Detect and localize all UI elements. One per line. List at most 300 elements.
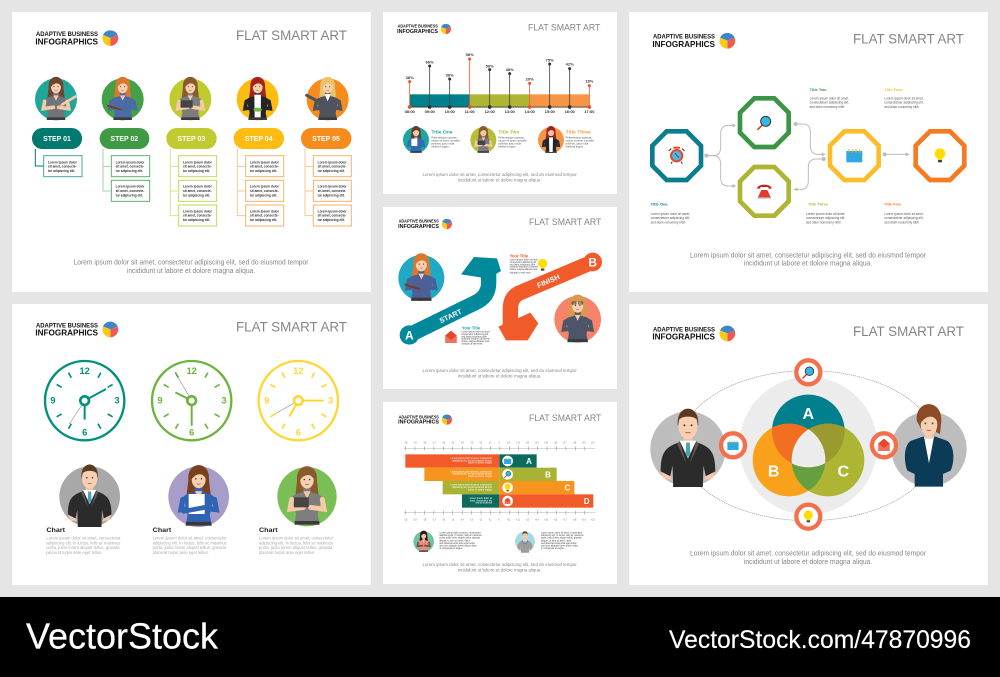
- orbit ellipse: [680, 371, 937, 521]
- top axis: +15: [544, 442, 549, 444]
- legend two: pulvinar, justo nulla: [498, 141, 521, 145]
- footer text: [73, 260, 309, 275]
- clock two: 6: [189, 428, 194, 438]
- text: finish title: euismod tincidunt ut laoreet: [510, 266, 538, 269]
- step 04 column: Lorem ipsum dolor: [250, 209, 280, 213]
- legend two: Title Two: [498, 129, 519, 135]
- logo: ADAPTIVE BUSINESS: [36, 31, 98, 38]
- footer text: incididunt ut labore et dolore magna aliqua.: [458, 567, 541, 572]
- bar captions: labore et dolore magna: [468, 488, 493, 491]
- heading: FLAT SMART ART: [853, 323, 964, 339]
- octagon: bulb: [916, 131, 964, 180]
- step 05 column: sit amet, consecte-: [318, 214, 346, 218]
- bottom axis: -10: [404, 519, 408, 521]
- text: title two: consectetuer adipiscing elit,: [810, 101, 849, 105]
- bar captions: Lorem ipsum dolor sit amet, consectetur: [451, 457, 492, 460]
- bar letters: D: [584, 497, 590, 506]
- heading: FLAT SMART ART: [529, 217, 602, 227]
- step 05 column: tur adipiscing elit.: [318, 218, 345, 222]
- step 05 column: STEP 05: [312, 136, 340, 143]
- footer text: Lorem ipsum dolor sit amet, consectetur adipiscing elit, sed do eiusmod tempor: [422, 368, 577, 373]
- person and text right: nisi nunc aliquam lorem ipsum dolor: [541, 545, 578, 548]
- heading: FLAT SMART ART: [236, 27, 347, 43]
- percentage spines: 18%: [585, 79, 594, 84]
- bottom axis: -11: [488, 519, 492, 521]
- step 02 column: sit amet, consecte-: [116, 189, 144, 193]
- footer text: [422, 172, 577, 183]
- bar letters: [526, 457, 590, 506]
- watermark band: [0, 597, 1000, 677]
- bar captions: [451, 457, 493, 505]
- logo: [397, 24, 451, 35]
- step 05 column: Lorem ipsum dolor: [318, 160, 347, 164]
- legend one: pulvinar, justo nulla: [431, 141, 454, 145]
- legend one: Title One: [431, 129, 453, 135]
- chart caption two: placerat turpis ante eget tellus.: [153, 550, 209, 555]
- watermark band: VectorStock: [26, 616, 219, 656]
- bar letters: A: [526, 457, 532, 466]
- step 03 column: sit amet, consecte-: [183, 189, 212, 193]
- person and text right: Lorem ipsum dolor sit amet, consectetur: [541, 531, 583, 534]
- person and text left: [413, 531, 483, 552]
- arrow: finish: B: [588, 255, 597, 269]
- step 03 column: tur adipiscing elit.: [183, 218, 210, 222]
- step 03 column: STEP 03: [177, 136, 205, 143]
- chart caption two: Lorem ipsum dolor sit amet, consectetur: [153, 535, 227, 540]
- bottom axis: +16: [553, 519, 558, 521]
- person and text right: porta, justo lorem aliquet tellus, gravida: [541, 537, 582, 540]
- bottom axis: +11: [507, 519, 511, 521]
- clock two: 9: [157, 396, 163, 406]
- text: start title: Lorem ipsum dolor sit amet,: [461, 331, 490, 334]
- step 04 column: sit amet, consecte-: [250, 165, 279, 169]
- bottom axis: +14: [535, 519, 539, 521]
- logo: ADAPTIVE BUSINESS: [398, 24, 438, 29]
- person and text left: aliquet, ut sem sit amet, dolor: [439, 539, 470, 542]
- heading: FLAT SMART ART: [236, 318, 347, 334]
- panel: venn diagram: [629, 304, 988, 585]
- logo: ADAPTIVE BUSINESS: [653, 34, 715, 41]
- chart caption one: adipiscing elit. In luctus, felis ac maximus: [46, 540, 120, 545]
- chart caption three: placerat turpis ante eget tellus.: [259, 550, 315, 555]
- step 04 column: tur adipiscing elit.: [250, 169, 277, 173]
- text: finish title: [510, 253, 539, 274]
- text: finish title: sed diam nonummy nibh: [510, 264, 536, 266]
- footer text: Lorem ipsum dolor sit amet, consectetur adipiscing elit, sed do eiusmod tempor: [690, 551, 927, 558]
- heading: FLAT SMART ART: [853, 30, 964, 46]
- octagon: magnifier: [740, 98, 789, 147]
- percentage spines: 50%: [486, 63, 494, 68]
- step 05 column: [301, 77, 351, 226]
- step 04 column: tur adipiscing elit.: [250, 218, 277, 222]
- bottom axis: -12: [479, 519, 483, 521]
- top axis: +16: [553, 442, 558, 444]
- person and text right: sed placerat turpis ante eget tellus: [541, 542, 577, 545]
- person and text left: in consequat et augue.: [439, 547, 463, 550]
- top axis: +17: [563, 442, 567, 444]
- icon ring: bulb: [796, 505, 820, 529]
- icon: envelope: [445, 331, 457, 343]
- arrow: start: A: [405, 328, 414, 342]
- person and text right: aliquet, ut sem sit amet, dolor: [541, 539, 572, 542]
- time labels: 13:00: [505, 109, 516, 114]
- percentage spines: 38%: [406, 75, 414, 80]
- logo: [35, 30, 118, 46]
- step 04 column: sit amet, consecte-: [250, 214, 279, 218]
- text: finish title: consectetur adipiscing elit,: [510, 261, 537, 264]
- bottom axis: +15: [544, 519, 549, 521]
- person and text right: [515, 531, 584, 553]
- arrow: start: START: [438, 307, 464, 325]
- footer text: Lorem ipsum dolor sit amet, consectetur adipiscing elit, sed do eiusmod tempor: [422, 172, 577, 177]
- bottom axis: -17: [432, 519, 436, 521]
- chart caption three: porta, justo lorem aliquet tellus, gravida: [259, 545, 333, 550]
- bottom axis: +18: [572, 519, 577, 521]
- text: title four: sed diam nonummy nibh: [884, 105, 919, 109]
- icon: bulb: [538, 259, 547, 271]
- chart caption three: Lorem ipsum dolor sit amet, consectetur: [259, 535, 334, 540]
- step 02 column: tur adipiscing elit.: [116, 169, 143, 173]
- step 02 column: Lorem ipsum dolor: [116, 185, 145, 189]
- clock two: 3: [221, 396, 227, 406]
- time labels: 09:00: [425, 109, 436, 114]
- panel: clocks: [12, 304, 371, 585]
- text: title one: consectetuer adipiscing elit,: [651, 216, 690, 220]
- footer text: Lorem ipsum dolor sit amet, consectetur adipiscing elit, sed do eiusmod tempor: [422, 562, 577, 567]
- octagon: phone: [740, 167, 789, 216]
- legend three: Title Three: [566, 129, 591, 135]
- text: title four: [884, 87, 924, 109]
- step 04 column: Lorem ipsum dolor: [250, 185, 280, 189]
- logo: ADAPTIVE BUSINESS: [399, 414, 439, 419]
- text: title four: consectetuer adipiscing elit,: [884, 101, 924, 105]
- legend three: eleifend augue.: [566, 144, 584, 148]
- top axis: -13: [470, 442, 474, 444]
- legend three: [538, 126, 595, 153]
- step 02 column: tur adipiscing elit.: [116, 193, 143, 197]
- octagon: clock: [652, 131, 701, 180]
- bottom axis: -14: [460, 519, 464, 521]
- person: woman with tablet: [277, 466, 337, 526]
- footer text: [422, 368, 577, 378]
- step 04 column: sit amet, consecte-: [250, 189, 279, 193]
- legend one: neque sit amet convallis: [431, 138, 460, 142]
- footer text: incididunt ut labore et dolore magna aliqua.: [458, 178, 541, 183]
- clock three: [259, 361, 338, 440]
- arrow: finish: [498, 253, 602, 340]
- icon ring: magnifier: [796, 360, 820, 384]
- step 01 column: STEP 01: [43, 136, 71, 143]
- step 04 column: tur adipiscing elit.: [250, 193, 277, 197]
- venn circles: C: [838, 463, 850, 480]
- footer text: [690, 252, 927, 268]
- panel: start to finish arrows: [383, 207, 617, 389]
- step 04 column: STEP 04: [245, 136, 273, 143]
- text: start title: volutpat ut wisi enim.: [461, 343, 483, 346]
- step 01 column: [32, 77, 82, 177]
- logo: [652, 33, 735, 49]
- text: title two: Lorem ipsum dolor sit amet,: [810, 97, 849, 101]
- time labels: 12:00: [485, 109, 496, 114]
- step 01 column: tur adipiscing elit.: [48, 169, 75, 173]
- text: title three: consectetuer adipiscing elit,: [806, 216, 845, 220]
- bar captions: Lorem ipsum dolor sit: [470, 497, 492, 500]
- person and text left: sed placerat turpis ante eget tellus: [439, 542, 476, 545]
- legend two: eleifend augue.: [498, 144, 517, 148]
- step 03 column: Lorem ipsum dolor: [183, 209, 213, 213]
- chart caption one: porta, justo lorem aliquet tellus, gravida: [46, 545, 120, 550]
- step 05 column: Lorem ipsum dolor: [318, 185, 347, 189]
- text: title five: consectetuer adipiscing elit,: [884, 216, 924, 220]
- top axis: -11: [488, 442, 492, 444]
- top axis: -15: [451, 442, 455, 444]
- time labels: 16:00: [565, 109, 576, 114]
- heading: FLAT SMART ART: [528, 22, 601, 32]
- footer text: [690, 551, 927, 566]
- top axis: 0: [499, 442, 501, 444]
- icon ring: envelope: [872, 433, 896, 457]
- top axis: -18: [423, 442, 427, 444]
- top axis: +12: [516, 442, 521, 444]
- percentage spines: 20%: [526, 77, 534, 82]
- percentage spines: 42%: [566, 62, 574, 67]
- step 05 column: sit amet, consecte-: [318, 165, 346, 169]
- text: start title: consectetur adipiscing elit,: [461, 333, 489, 336]
- bottom axis: +10: [591, 519, 595, 521]
- percentage spines: 38%: [446, 72, 454, 77]
- text: finish title: dolore magna aliquam erat: [510, 268, 538, 271]
- legend one: Pellentesque egestas,: [431, 135, 458, 139]
- bottom axis: [404, 513, 595, 521]
- text: start title: dolore magna aliquam erat: [461, 340, 489, 343]
- text: title two: [810, 87, 849, 109]
- bar captions: sed do eiusmod: [476, 503, 493, 505]
- clock two: 12: [186, 366, 197, 376]
- watermark band: VectorStock.com/47870996: [669, 626, 971, 654]
- top axis: -17: [432, 442, 436, 444]
- timeline bars: [409, 94, 590, 107]
- bottom axis: +13: [525, 519, 530, 521]
- step 02 column: Lorem ipsum dolor: [116, 160, 145, 164]
- logo: INFOGRAPHICS: [652, 39, 715, 49]
- logo: INFOGRAPHICS: [652, 332, 715, 342]
- step 03 column: Lorem ipsum dolor: [183, 185, 213, 189]
- logo: INFOGRAPHICS: [35, 36, 98, 46]
- person and text left: adipiscing elit. In luctus, felis ac maximus: [439, 534, 483, 537]
- step 03 column: tur adipiscing elit.: [183, 193, 210, 197]
- bottom axis: 0: [499, 519, 501, 521]
- time labels: [405, 109, 595, 114]
- logo: ADAPTIVE BUSINESS: [399, 219, 439, 224]
- clock three: 9: [264, 396, 269, 406]
- logo: INFOGRAPHICS: [397, 29, 438, 35]
- panel: five steps: [12, 12, 371, 292]
- clock two: [152, 361, 231, 440]
- top axis: +13: [525, 442, 530, 444]
- clock three: 3: [328, 396, 333, 406]
- text: title four: Title Four: [884, 87, 903, 92]
- person and text left: Lorem ipsum dolor sit amet, consectetur: [439, 531, 481, 534]
- footer text: incididunt ut labore et dolore magna aliqua.: [127, 268, 255, 275]
- text: finish title: Your Title: [510, 253, 528, 259]
- connectors: [704, 122, 910, 191]
- legend two: Pellentesque egestas,: [498, 135, 525, 139]
- person and text right: in consequat et augue.: [541, 547, 565, 550]
- text: finish title: volutpat ut wisi enim.: [510, 271, 532, 274]
- text: title five: Title Five: [884, 202, 902, 207]
- top axis: -19: [413, 442, 417, 444]
- percentage spines: 60%: [426, 60, 434, 65]
- businessman: [650, 409, 726, 487]
- businesswoman: [891, 404, 967, 487]
- text: title one: [651, 202, 690, 224]
- percentage spines: 48%: [506, 67, 514, 72]
- legend three: Pellentesque egestas,: [566, 135, 592, 139]
- step 05 column: tur adipiscing elit.: [318, 193, 345, 197]
- text: finish title: Lorem ipsum dolor sit amet,: [510, 259, 539, 262]
- clock one: [45, 361, 124, 440]
- chart caption one: [46, 527, 121, 555]
- footer text: incididunt ut labore et dolore magna aliqua.: [458, 373, 541, 378]
- step 02 column: STEP 02: [110, 136, 138, 143]
- bar captions: adipiscing elit, sed do eiusmod tempor: [452, 486, 492, 489]
- top axis: +10: [591, 442, 595, 444]
- clock one: 12: [79, 366, 90, 376]
- step 05 column: sit amet, consecte-: [318, 189, 346, 193]
- person: man: [59, 464, 120, 527]
- text: title one: Title One: [651, 202, 668, 207]
- time labels: 10:00: [445, 109, 456, 114]
- top axis: [404, 442, 595, 448]
- octagon: calendar: [830, 131, 879, 180]
- text: title two: sed diam nonummy nibh: [810, 105, 845, 109]
- footer text: [422, 562, 577, 572]
- logo: [35, 322, 118, 338]
- percentage spines: [406, 52, 594, 109]
- text: title five: Lorem ipsum dolor sit amet,: [884, 212, 924, 216]
- footer text: incididunt ut labore et dolore magna aliqua.: [744, 261, 872, 268]
- top axis: +11: [507, 442, 511, 444]
- top axis: -10: [404, 442, 408, 444]
- venn circles: A: [803, 406, 815, 423]
- logo: INFOGRAPHICS: [35, 328, 98, 338]
- panel: octagon flow: [629, 12, 988, 292]
- text: title one: sed diam nonummy nibh: [651, 220, 686, 224]
- text: start title: sed diam nonummy nibh: [461, 336, 487, 338]
- bottom axis: +17: [563, 519, 567, 521]
- top axis: +19: [582, 442, 586, 444]
- bar captions: labore et dolore magna: [468, 462, 493, 465]
- text: title four: Lorem ipsum dolor sit amet,: [884, 97, 924, 101]
- bottom axis: -18: [423, 519, 427, 521]
- chart caption one: placerat turpis ante eget tellus.: [46, 550, 102, 555]
- woman with glasses: [554, 295, 601, 343]
- person and text left: nisi nunc aliquam lorem ipsum dolor: [439, 545, 477, 548]
- woman with notebook: [398, 253, 444, 301]
- footer text: Lorem ipsum dolor sit amet, consectetur adipiscing elit, sed do eiusmod tempor: [690, 252, 927, 259]
- percentage spines: 75%: [546, 57, 554, 62]
- chart caption two: adipiscing elit. In luctus, felis ac maximus: [153, 540, 227, 545]
- text: title three: sed diam nonummy nibh: [806, 220, 841, 224]
- step 03 column: Lorem ipsum dolor: [183, 160, 213, 164]
- text: title one: Lorem ipsum dolor sit amet,: [651, 212, 690, 216]
- bar letters: C: [564, 484, 570, 493]
- legend three: pulvinar, justo nulla: [566, 141, 589, 145]
- bar captions: Lorem ipsum dolor sit amet, consectetur: [451, 470, 492, 473]
- top axis: +18: [572, 442, 577, 444]
- step 03 column: sit amet, consecte-: [183, 214, 212, 218]
- chart caption two: porta, justo lorem aliquet tellus, gravida: [153, 545, 227, 550]
- legend one: eleifend augue.: [431, 144, 450, 148]
- step 01 column: Lorem ipsum dolor: [48, 160, 78, 164]
- time labels: 08:00: [405, 109, 416, 114]
- text: start title: euismod tincidunt ut laoreet: [461, 338, 490, 341]
- venn circles: [753, 395, 864, 496]
- panel: diverging bars: [383, 402, 617, 584]
- step 03 column: sit amet, consecte-: [183, 165, 212, 169]
- background disc: [739, 377, 877, 515]
- logo: [398, 414, 452, 426]
- bottom axis: -13: [470, 519, 474, 521]
- venn circles: B: [768, 463, 779, 480]
- text: start title: Your Title: [462, 325, 480, 331]
- text: start title: [461, 325, 490, 346]
- text: title two: Title Two: [810, 87, 827, 92]
- time labels: 17:00: [584, 109, 595, 114]
- time labels: 14:00: [525, 109, 536, 114]
- step 02 column: sit amet, consecte-: [116, 165, 144, 169]
- text: title five: [884, 202, 924, 224]
- step 02 column: [100, 77, 150, 201]
- logo: [398, 219, 452, 230]
- time labels: 15:00: [545, 109, 556, 114]
- step 05 column: Lorem ipsum dolor: [318, 209, 347, 213]
- step 01 column: sit amet, consecte-: [48, 165, 77, 169]
- arrow: finish: FINISH: [536, 272, 561, 290]
- bottom axis: +12: [516, 519, 521, 521]
- top axis: +14: [535, 442, 539, 444]
- text: title three: Lorem ipsum dolor sit amet,: [806, 212, 845, 216]
- step 03 column: tur adipiscing elit.: [183, 169, 210, 173]
- bar captions: labore et dolore magna: [468, 475, 493, 478]
- bottom axis: -19: [413, 519, 417, 521]
- step 03 column: [166, 77, 217, 226]
- top axis: -16: [442, 442, 446, 444]
- clock one: 3: [114, 396, 120, 406]
- clock three: 12: [293, 366, 304, 376]
- logo: INFOGRAPHICS: [398, 420, 439, 426]
- percentage spines: 58%: [466, 52, 474, 57]
- chart caption two: [153, 527, 227, 555]
- top axis: -12: [479, 442, 483, 444]
- bar captions: adipiscing elit, sed do eiusmod tempor: [452, 459, 492, 462]
- logo: [652, 326, 735, 342]
- chart caption three: Chart: [259, 527, 278, 534]
- clock one: 6: [82, 428, 87, 438]
- footer text: Lorem ipsum dolor sit amet, consectetur adipiscing elit, sed do eiusmod tempor: [73, 260, 309, 267]
- text: title five: sed diam nonummy nibh: [884, 220, 919, 224]
- logo: ADAPTIVE BUSINESS: [36, 322, 98, 329]
- logo: INFOGRAPHICS: [398, 224, 439, 230]
- bottom axis: -16: [442, 519, 446, 521]
- bottom axis: -15: [451, 519, 455, 521]
- text: title three: Title Three: [808, 202, 829, 207]
- bottom axis: +19: [582, 519, 586, 521]
- bar rows: [405, 454, 593, 508]
- legend three: neque sit amet convallis: [566, 138, 595, 142]
- bar letters: B: [545, 470, 551, 479]
- chart caption three: adipiscing elit. In luctus, felis ac maximus: [259, 540, 333, 545]
